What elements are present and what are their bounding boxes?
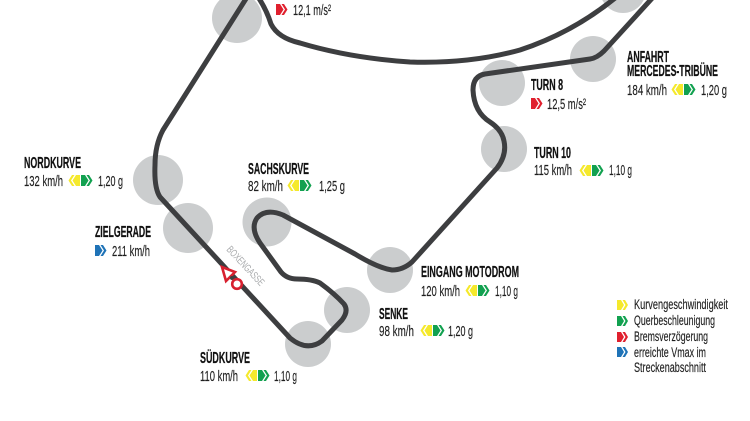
legend xyxy=(617,297,728,375)
label: Zielgerade: 211 km/h xyxy=(112,243,150,260)
label: Turn 10: 1,10 g xyxy=(609,162,632,179)
label: Turn 8 xyxy=(531,77,586,113)
label: Südkurve: SÜDKURVE xyxy=(200,350,250,367)
label: Zielgerade: ZIELGERADE xyxy=(95,224,151,241)
label: Turn 8: 12,5 m/s² xyxy=(547,96,586,113)
label: Südkurve: 1,10 g xyxy=(274,368,297,385)
label: Eingang Motodrom xyxy=(421,264,519,300)
label: Turn 10: 115 km/h xyxy=(534,162,572,179)
label: Anfahrt Mercedes-Tribüne xyxy=(627,49,727,99)
label: Nordkurve: NORDKURVE xyxy=(24,155,81,172)
label: Anfahrt Mercedes-Tribüne: 1,20 g xyxy=(701,82,727,99)
pit lane label: BOXENGASSE xyxy=(224,244,267,289)
label: Südkurve xyxy=(200,350,297,385)
legend: Bremsverzögerung xyxy=(634,329,708,344)
label: Südkurve: 110 km/h xyxy=(200,368,238,385)
label: Senke: 98 km/h xyxy=(379,323,414,340)
label: Nordkurve xyxy=(24,155,123,190)
race track line xyxy=(155,0,656,346)
label: Senke: 1,20 g xyxy=(448,323,473,340)
label: Senke xyxy=(379,306,473,340)
corner markers xyxy=(133,0,646,367)
label: Sachskurve: 1,25 g xyxy=(319,178,345,195)
label: Eingang Motodrom: 120 km/h xyxy=(421,283,460,300)
label: Turn 8: TURN 8 xyxy=(531,77,563,94)
label: Eingang Motodrom: EINGANG MOTODROM xyxy=(421,264,519,281)
start finish arrow xyxy=(222,267,242,289)
label: Nordkurve: 1,20 g xyxy=(98,173,123,190)
label: Turn 10: TURN 10 xyxy=(534,145,571,162)
label: Sachskurve: SACHSKURVE xyxy=(248,161,309,178)
label: Anfahrt Mercedes-Tribüne: ANFAHRT xyxy=(627,49,669,66)
label: Zielgerade xyxy=(95,224,151,260)
label: Turn 10 xyxy=(534,145,632,179)
legend: Streckenabschnitt xyxy=(634,360,706,375)
label: top braking value: 12,1 m/s² xyxy=(293,2,331,19)
label: Eingang Motodrom: 1,10 g xyxy=(495,283,518,300)
label: Nordkurve: 132 km/h xyxy=(24,173,63,190)
label: top braking value xyxy=(276,2,331,19)
label: Sachskurve xyxy=(248,161,345,195)
label: Anfahrt Mercedes-Tribüne: 184 km/h xyxy=(627,82,667,99)
label: Senke: SENKE xyxy=(379,306,408,323)
label: Sachskurve: 82 km/h xyxy=(248,178,283,195)
legend: erreichte Vmax im xyxy=(634,345,706,360)
